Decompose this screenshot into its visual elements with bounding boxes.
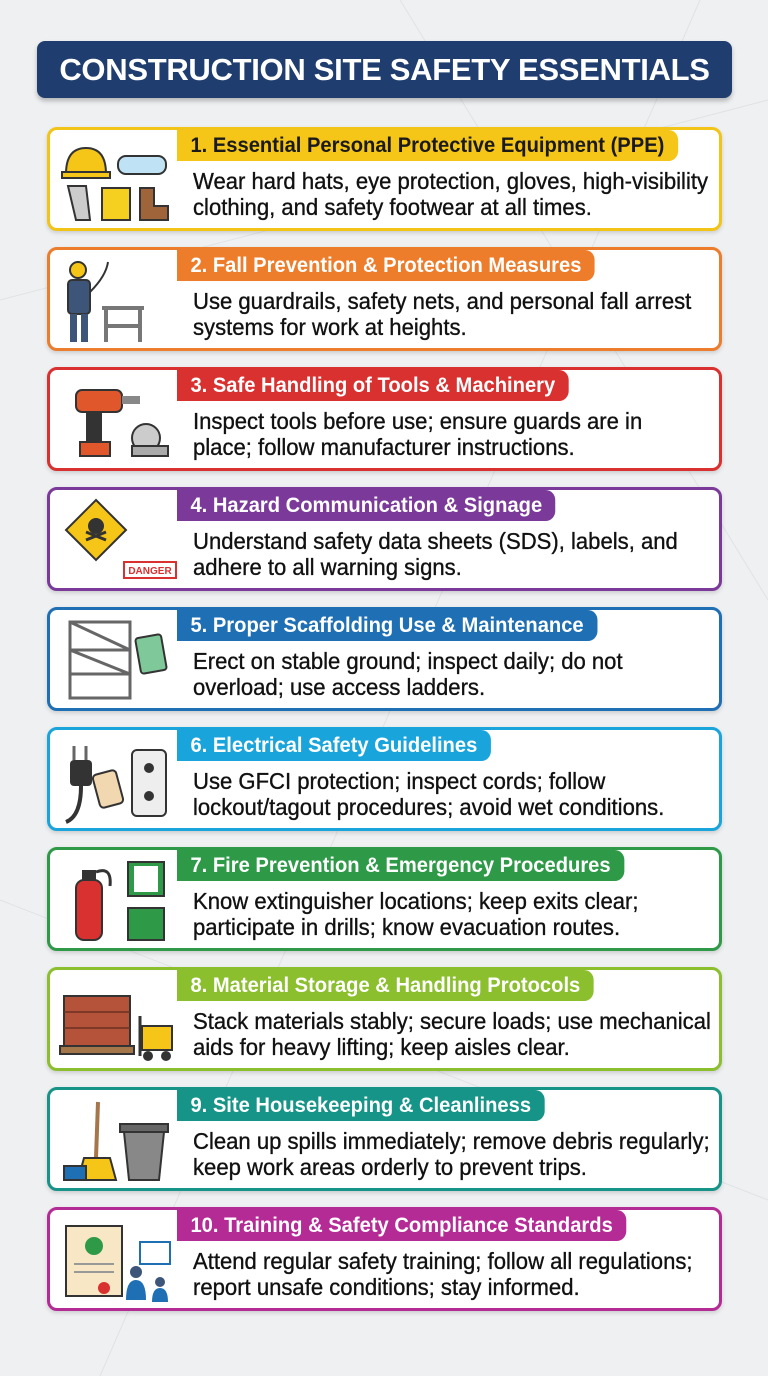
icon: plug and outlet [65,746,167,824]
text: housekeeping: keep work areas orderly to prevent trips. [193,1154,587,1180]
panel: fall prevention [47,247,722,351]
header: hazard communication [177,490,556,521]
icon: drill and saw [75,389,169,457]
text: tools: place; follow manufacturer instructions. [193,434,575,460]
text: training: report unsafe conditions; stay informed. [193,1274,580,1300]
header: hazard communication: 4. Hazard Communication & Signage [190,494,542,517]
header: housekeeping: 9. Site Housekeeping & Cleanliness [190,1094,531,1117]
header: tools [177,370,569,401]
icon: hazard sign [64,498,177,579]
text: material storage [193,1008,711,1060]
title [37,41,732,98]
panel: housekeeping [47,1087,722,1191]
header: scaffolding: 5. Proper Scaffolding Use & Maintenance [190,614,584,637]
header: PPE: 1. Essential Personal Protective Equipment (PPE) [190,134,664,157]
text: training: Attend regular safety training; follow all regulations; [193,1248,693,1274]
header: electrical: 6. Electrical Safety Guidelines [190,734,477,757]
header: material storage: 8. Material Storage & Handling Protocols [190,974,580,997]
text: material storage: Stack materials stably; secure loads; use mechanical [193,1008,711,1034]
header: fall prevention: 2. Fall Prevention & Protection Measures [190,254,581,277]
text: scaffolding [193,648,623,700]
header: tools: 3. Safe Handling of Tools & Machinery [190,374,555,397]
text: electrical: lockout/tagout procedures; avoid wet conditions. [193,794,664,820]
icon: broom and bin [63,1102,169,1181]
header: scaffolding [177,610,597,641]
text: PPE: Wear hard hats, eye protection, gloves, high-visibility [193,168,708,194]
text: PPE: clothing, and safety footwear at all times. [193,194,592,220]
icon: hazard sign: DANGER [128,566,172,577]
panel: scaffolding [47,607,722,711]
text: scaffolding: Erect on stable ground; inspect daily; do not [193,648,623,674]
text: fire prevention [193,888,639,940]
text: hazard communication: Understand safety data sheets (SDS), labels, and [193,528,678,554]
panel: electrical [47,727,722,831]
text: housekeeping [193,1128,710,1180]
text: fall prevention [193,288,692,340]
text: hazard communication [193,528,678,580]
text: tools [193,408,642,460]
text: housekeeping: Clean up spills immediately; remove debris regularly; [193,1128,710,1154]
icon: bricks and forklift [59,995,173,1061]
icon: certificate and trainer [65,1225,171,1302]
header: training: 10. Training & Safety Compliance Standards [190,1214,613,1237]
header: fire prevention: 7. Fire Prevention & Emergency Procedures [190,854,611,877]
panel: tools [47,367,722,471]
header: electrical [177,730,491,761]
panel: material storage [47,967,722,1071]
text: PPE [192,168,708,220]
text: fall prevention: systems for work at heights. [193,314,467,340]
icon: extinguisher and exit [75,861,165,941]
text: fall prevention: Use guardrails, safety nets, and personal fall arrest [193,288,691,314]
header: fire prevention [177,850,624,881]
header: fall prevention [177,250,595,281]
icon: harness worker [67,261,144,342]
text: fire prevention: Know extinguisher locations; keep exits clear; [193,888,639,914]
text: electrical [193,768,664,820]
text: training [192,1248,693,1300]
icon: PPE [61,147,169,221]
panel: training [47,1207,722,1311]
header: material storage [177,970,594,1001]
panel: hazard communication [47,487,722,591]
header: housekeeping [177,1090,544,1121]
text: tools: Inspect tools before use; ensure guards are in [193,408,642,434]
text: electrical: Use GFCI protection; inspect cords; follow [193,768,605,794]
icon: scaffolding [68,620,168,700]
text: fire prevention: participate in drills; know evacuation routes. [193,914,620,940]
header: training [177,1210,626,1241]
text: material storage: aids for heavy lifting; keep aisles clear. [193,1034,570,1060]
panel: PPE [47,127,722,231]
text: scaffolding: overload; use access ladders. [193,674,485,700]
panel: fire prevention [47,847,722,951]
title: CONSTRUCTION SITE SAFETY ESSENTIALS [59,52,710,87]
text: hazard communication: adhere to all warning signs. [193,554,462,580]
